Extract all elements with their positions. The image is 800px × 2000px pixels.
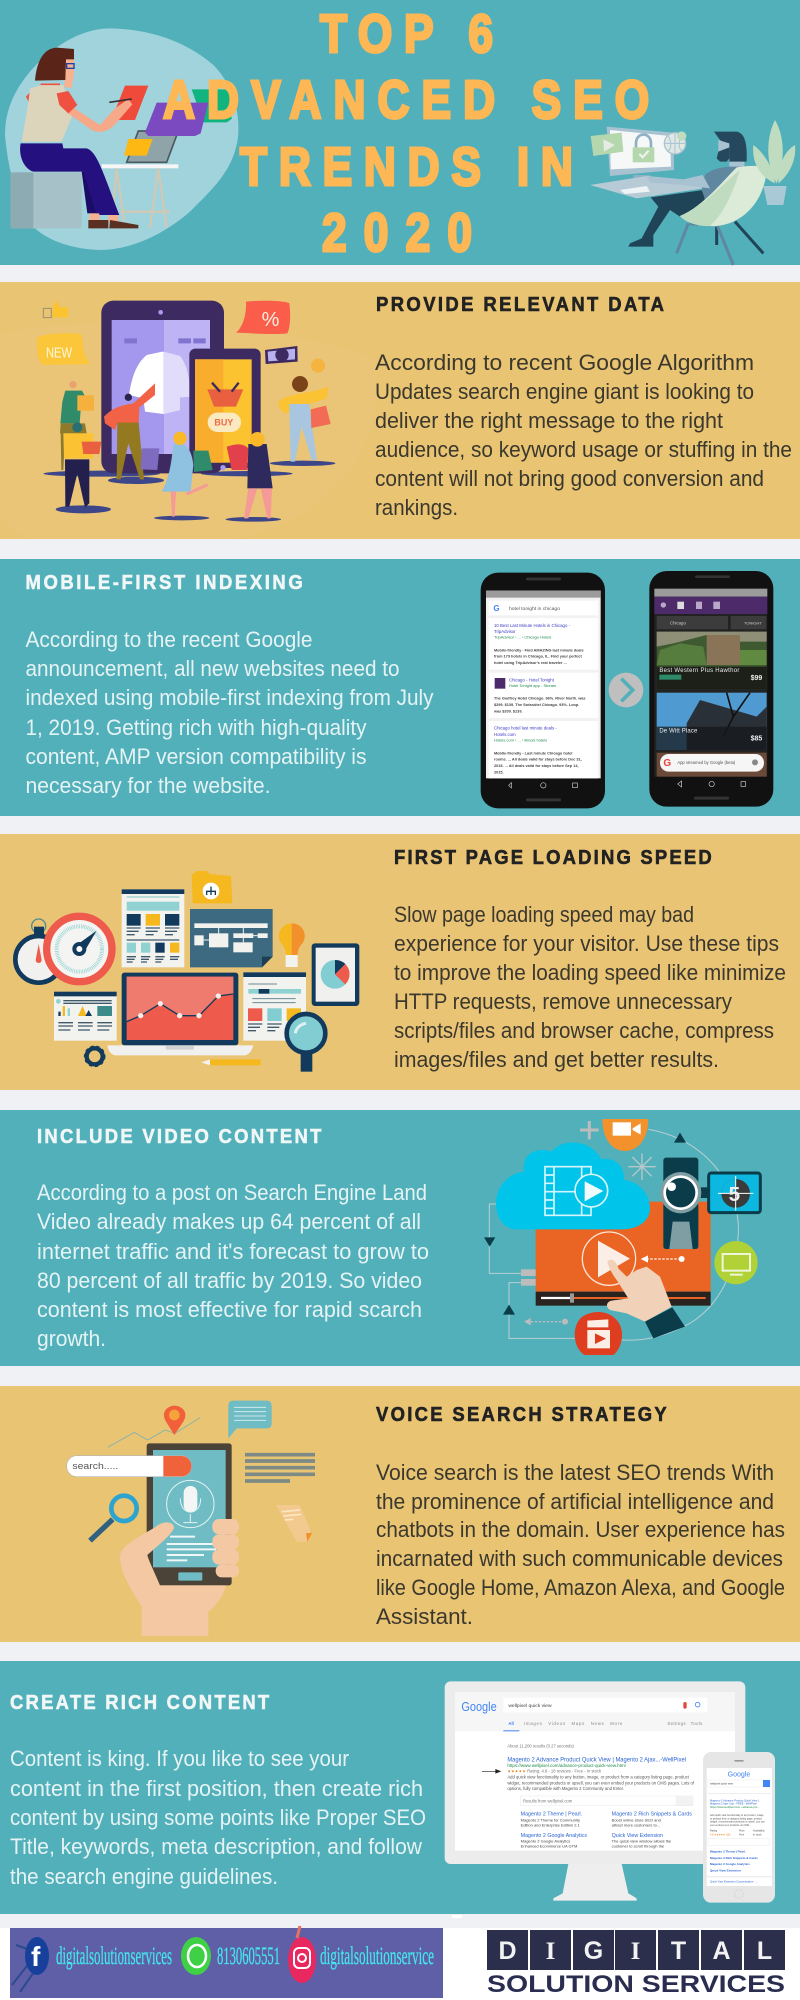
icon: whatsapp	[181, 1937, 211, 1975]
phone: hotel app	[649, 571, 773, 807]
phone: hotel app: $99	[751, 675, 762, 682]
monitor: Results from wellpixel.com	[523, 1798, 573, 1803]
text block: Video already makes up 64 percent of all	[37, 1209, 421, 1234]
monitor: options, fully compatible with Magento 2 Community and Enter.	[507, 1786, 624, 1791]
heading: VOICE SEARCH STRATEGY	[376, 1403, 667, 1426]
icon: tablet chart	[312, 943, 359, 1006]
phone: even embed your products on CMS ...	[710, 1824, 752, 1827]
heading: MOBILE-FIRST INDEXING	[26, 571, 303, 594]
phone: Quick View Extension Customization - ...	[710, 1880, 758, 1884]
phone: Magento 2 Theme | Pearl.	[710, 1850, 746, 1854]
phone: Add quick view functionality to any button, image,	[710, 1814, 765, 1817]
icon: spark	[628, 1153, 656, 1180]
phone: search results: Chicago hotel last minute deals -	[494, 726, 557, 731]
illustration: online shopping: %	[262, 309, 280, 331]
text block: experience for your visitor. Use these tips	[394, 931, 779, 956]
text block: growth.	[37, 1326, 106, 1351]
icon: magnifier	[287, 1014, 325, 1072]
icon: cloud	[496, 1142, 650, 1229]
icon: instagram	[288, 1926, 316, 1983]
monitor: Magento 2 Theme for Community	[521, 1817, 580, 1822]
phone: https://www.wellpixel.com › advance-pro...	[710, 1805, 760, 1809]
title: TOP 6	[320, 4, 493, 64]
text block: content in the first position, then create rich	[10, 1776, 423, 1801]
logo: SOLUTION SERVICES	[487, 1971, 785, 1998]
text block	[394, 902, 786, 1072]
illustration: speed dashboard	[15, 871, 359, 1072]
icon: speech bubble	[228, 1401, 272, 1438]
text block: Title, keywords, meta description, and follow	[10, 1834, 423, 1859]
text block: content, AMP version compatibility is	[26, 744, 366, 769]
phone: search results: hotel using TripAdvisor's real traveler ...	[494, 661, 567, 665]
text block	[376, 1460, 785, 1629]
text block	[375, 350, 792, 520]
phone: search results: Mobile-friendly - Find AMAZING last minute deals	[494, 648, 584, 652]
text block: rankings.	[375, 495, 458, 520]
phone: search results: Hotels.com › ... › Illinois hotels	[494, 738, 547, 743]
text block	[37, 1180, 429, 1351]
panel: header	[0, 0, 800, 265]
text block: Content is king. If you like to see your	[10, 1746, 349, 1771]
text block: Updates search engine giant is looking to	[375, 379, 754, 404]
phone: search results: was $209. $139.	[493, 709, 523, 713]
text block: the prominence of artificial intelligence and	[376, 1489, 774, 1514]
text block: Assistant.	[376, 1604, 473, 1629]
phone: search results: The Godfrey Hotel Chicago. 96%. River North. was	[494, 697, 585, 701]
phone: search results: hotel tonight in chicago	[509, 606, 560, 612]
illustration: two phones	[481, 571, 773, 808]
text block: internet traffic and it's forecast to grow to	[37, 1239, 429, 1264]
title: 2020	[322, 203, 472, 263]
search bar: search.....	[72, 1461, 118, 1471]
video player	[521, 1202, 711, 1306]
icon: map pin	[164, 1406, 185, 1435]
icon: countdown	[709, 1173, 760, 1213]
illustration: online shopping: BUY	[214, 418, 233, 428]
text block: deliver the right message to the right	[375, 408, 724, 433]
panel: first page loading speed	[0, 834, 800, 1090]
text block: the search engine guidelines.	[10, 1864, 278, 1889]
phone: Rating	[710, 1829, 718, 1832]
icon: facebook	[12, 1937, 49, 1992]
illustration: man at computer	[590, 120, 795, 265]
monitor: Enhanced Ecommerce UA GTM	[521, 1843, 577, 1848]
panel: footer	[0, 1915, 800, 2000]
monitor: The quick view window allows the	[612, 1838, 672, 1843]
logo: A	[712, 1937, 731, 1965]
monitor: attract more customers to...	[612, 1822, 660, 1827]
icon: pointing hand	[607, 1260, 685, 1338]
phone: hotel app: De Witt Place	[659, 729, 698, 735]
icon: webcam	[660, 1158, 708, 1249]
phone: search results: Chicago - Hotel Tonight	[509, 677, 555, 682]
phone: search results: rooms. ... All deals valid for stays before Dec 31,	[494, 758, 582, 762]
phone: hotel app: Chicago	[670, 620, 686, 625]
phone: search results: $299. $139. The Swissôtel Chicago. 93%. Loop.	[494, 703, 579, 707]
panel: create rich content	[0, 1661, 800, 1914]
phone: search results	[481, 573, 605, 808]
monitor: ★★★★★ Rating: 4.8 - 18 reviews - Free - In stock	[507, 1769, 602, 1774]
text block: According to the recent Google	[26, 627, 312, 652]
text block: indexed using mobile-first indexing from July	[26, 685, 434, 710]
phone: search results: G	[493, 604, 500, 613]
icon: laptop line chart	[107, 973, 253, 1055]
text block: 1, 2019. Getting rich with high-quality	[26, 715, 367, 740]
monitor: https://www.wellpixel.com/advance-product-quick-view.html	[507, 1763, 626, 1768]
title	[163, 4, 649, 263]
text block: HTTP requests, remove unnecessary	[394, 989, 733, 1014]
icon: light bulb	[279, 923, 305, 967]
icon: monitor badge	[714, 1241, 758, 1284]
search bar	[67, 1456, 191, 1477]
icon: folder	[192, 871, 232, 903]
phone: Magento 2 Google Analytics	[710, 1862, 750, 1866]
phone: search results: 2015.	[494, 770, 504, 774]
social banner	[10, 1926, 443, 1998]
heading: PROVIDE RELEVANT DATA	[376, 293, 664, 316]
phone: hotel app: G	[663, 758, 671, 769]
icon: note	[276, 1505, 312, 1542]
monitor: Magento 2 Advance Product Quick View | Magento 2 Ajax...-WellPixel	[507, 1758, 686, 1764]
phone: Free	[739, 1834, 745, 1837]
text block: necessary for the website.	[26, 773, 270, 798]
phone	[147, 1443, 232, 1585]
monitor: Magento 2 Theme | Pearl.	[521, 1812, 582, 1818]
monitor: Magento 2 Rich Snippets & Cards	[612, 1812, 692, 1818]
logo	[487, 1930, 785, 1998]
icon: facebook: f	[31, 1941, 41, 1972]
icon: gear	[85, 1047, 104, 1066]
heading: FIRST PAGE LOADING SPEED	[394, 846, 712, 869]
monitor: All	[508, 1721, 514, 1726]
text block: 80 percent of all traffic by 2019. So video	[37, 1268, 422, 1293]
logo: D	[498, 1937, 517, 1965]
text block	[26, 627, 434, 798]
illustration: online shopping: NEW	[46, 344, 73, 361]
illustration: online shopping	[0, 300, 377, 539]
icon: arrow circle	[609, 673, 643, 707]
logo: L	[757, 1937, 772, 1965]
heading: INCLUDE VIDEO CONTENT	[37, 1125, 321, 1148]
phone: Magento 2 Advance Product Quick View |	[710, 1798, 759, 1802]
panel: mobile-first indexing	[0, 559, 800, 816]
phone: search results: Hotel Tonight app - Stream	[509, 683, 557, 688]
monitor: Edition and Enterprise Edition 2.1	[521, 1822, 581, 1827]
monitor: widget, recommended products or upsell, you can even embed your products on CMS pages. Lots of	[507, 1780, 695, 1785]
phone: In stock	[753, 1834, 762, 1837]
monitor: Settings Tools	[667, 1721, 702, 1726]
text block: According to recent Google Algorithm	[375, 350, 754, 375]
logo: I	[546, 1938, 555, 1965]
illustration: voice search on phone	[67, 1401, 315, 1636]
logo: T	[671, 1937, 686, 1965]
monitor: Quick View Extension	[612, 1833, 663, 1839]
icon: magnifier	[90, 1496, 137, 1541]
document: left	[54, 992, 117, 1041]
text block	[10, 1746, 426, 1889]
phone: search results: 2015. ... All deals valid for stays before Sep 14,	[494, 764, 579, 768]
phone: Quick View Extension	[710, 1869, 741, 1873]
logo: I	[631, 1938, 640, 1965]
phone: search results: 10 Best Last Minute Hotels in Chicago -	[494, 623, 571, 628]
illustration: desktop and phone search results	[445, 1681, 775, 1903]
social handle: digitalsolutionservice	[320, 1943, 434, 1970]
phone: search results: Hotels.com	[494, 732, 516, 737]
phone: hotel app: TONIGHT	[744, 620, 762, 625]
monitor: Boost online store SEO and	[612, 1817, 661, 1822]
text block: content by using some points like Proper SEO	[10, 1805, 426, 1830]
text lines	[245, 1455, 315, 1481]
phone: search results: from 179 hotels in Chicago, IL. Find your perfect	[494, 655, 583, 659]
monitor: Magento 2 Google Analytics	[521, 1838, 570, 1843]
icon: camera badge	[602, 1119, 648, 1151]
phone: search results: TripAdvisor › ... › Chicago Hotels	[494, 635, 551, 640]
phone: search results: Mobile-friendly - Last minute Chicago hotel	[494, 751, 572, 755]
text block: announcement, all new websites need to	[26, 656, 400, 681]
phone: Price	[739, 1829, 745, 1832]
text block: According to a post on Search Engine Land	[37, 1180, 427, 1205]
social handle: digitalsolutionservices	[56, 1943, 172, 1970]
panel: include video content	[0, 1110, 800, 1366]
text block: Voice search is the latest SEO trends With	[376, 1460, 774, 1485]
phone: search results: TripAdvisor	[494, 629, 516, 634]
phone: Magento 2 Rich Snippets & Cards	[710, 1856, 758, 1860]
heading: CREATE RICH CONTENT	[10, 1691, 269, 1714]
phone: widget, recommended products or upsell, you can	[710, 1821, 765, 1824]
phone: Google	[728, 1772, 750, 1779]
phone number: 8130605551	[217, 1943, 280, 1970]
monitor: customer to scroll through the	[612, 1843, 665, 1848]
phone: Magento 2 Ajax Cart - FREE - WellPixel	[710, 1802, 757, 1806]
icon: gauge	[47, 916, 112, 982]
text block: images/files and get better results.	[394, 1047, 719, 1072]
phone	[703, 1752, 775, 1903]
hand	[120, 1519, 239, 1636]
text block: Slow page loading speed may bad	[394, 902, 694, 927]
illustration: video marketing	[484, 1119, 760, 1355]
panel: provide relevant data	[0, 282, 800, 539]
monitor: wellpixel quick view	[508, 1703, 552, 1709]
phone: 4.8 ★★★★★ (18)	[710, 1834, 731, 1837]
phone: hotel app: Best Western Plus Hawthor	[659, 668, 739, 674]
monitor: Google	[461, 1700, 497, 1714]
panel: voice search strategy	[0, 1386, 800, 1642]
phone: wellpixel quick view	[710, 1782, 733, 1786]
monitor: About 11,200 results (0.27 seconds)	[507, 1744, 574, 1749]
flowchart note	[190, 909, 273, 967]
monitor: Images Videos Maps News More	[524, 1721, 623, 1726]
title: TRENDS IN	[240, 137, 573, 197]
illustration: woman working at desk	[5, 28, 238, 250]
document: top	[122, 889, 184, 967]
phone: or product from a category listing page, product	[710, 1817, 762, 1820]
monitor: Magento 2 Google Analytics	[521, 1833, 587, 1839]
monitor	[445, 1681, 745, 1901]
icon: countdown: 5	[729, 1183, 740, 1206]
phone: Availability	[753, 1829, 765, 1832]
text block: scripts/files and browser cache, compress	[394, 1018, 774, 1043]
monitor: Add quick view functionality to any button, image, or product from a category listing page, product	[507, 1775, 690, 1780]
icon: stopwatch	[15, 919, 62, 983]
title: ADVANCED SEO	[163, 70, 649, 130]
phone: hotel app: App streamed by Google (beta)	[677, 760, 736, 765]
text block: content is most effective for rapid scarch	[37, 1297, 422, 1322]
icon: clapper badge	[575, 1312, 622, 1355]
phone: hotel app: $85	[751, 735, 762, 742]
icon: pencil	[201, 1059, 261, 1065]
text block: content will not bring good conversion and	[375, 466, 764, 491]
document: right	[243, 972, 306, 1041]
logo: G	[584, 1937, 603, 1965]
